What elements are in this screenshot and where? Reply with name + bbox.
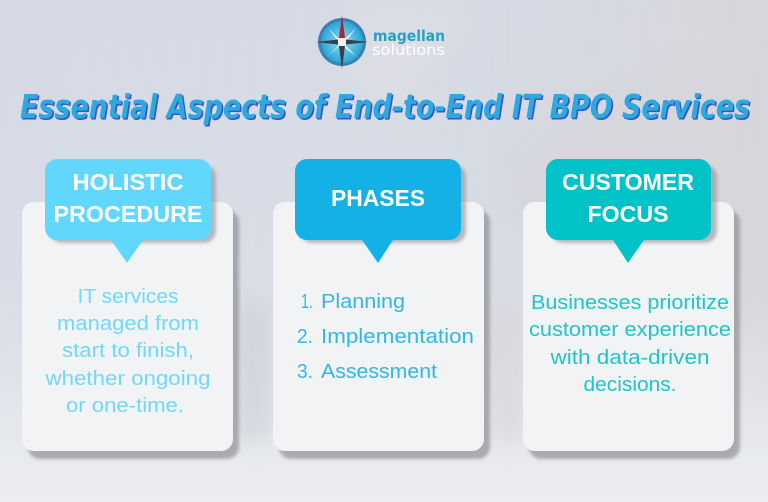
- logo wordmark: magellan: [373, 27, 445, 45]
- heading badge: [546, 159, 711, 263]
- logo: magellan solutions: [316, 15, 445, 69]
- icon: compass: [316, 15, 368, 69]
- heading badge: CUSTOMER: [562, 169, 694, 195]
- body text: [44, 285, 211, 417]
- heading badge: FOCUS: [588, 201, 668, 227]
- numbered list: Implementation: [321, 325, 474, 348]
- numbered list: Planning: [321, 290, 405, 313]
- body text: managed from: [57, 312, 199, 335]
- panel: holistic procedure: [22, 159, 239, 459]
- body text: with data-driven: [549, 346, 710, 369]
- body text: IT services: [78, 285, 178, 308]
- numbered list: 2.: [297, 325, 313, 348]
- numbered list: 3.: [297, 360, 313, 383]
- card body: [273, 202, 484, 451]
- body text: start to finish,: [62, 339, 194, 362]
- heading badge: [45, 159, 211, 263]
- numbered list: 1.: [301, 290, 313, 313]
- body text: [529, 291, 731, 396]
- logo wordmark: solutions: [372, 41, 445, 59]
- panel: phases: [273, 159, 490, 459]
- heading badge: PHASES: [331, 185, 425, 211]
- body text: customer experience: [529, 318, 731, 341]
- heading badge: PROCEDURE: [54, 201, 202, 227]
- body text: decisions.: [584, 373, 676, 396]
- numbered list: Assessment: [321, 360, 437, 383]
- body text: or one-time.: [66, 394, 184, 417]
- logo wordmark: [372, 27, 445, 59]
- numbered list: [297, 290, 474, 383]
- card body: [22, 202, 233, 451]
- panel: customer focus: [523, 159, 740, 459]
- heading badge: [295, 159, 461, 263]
- card body: [523, 202, 734, 451]
- heading badge: HOLISTIC: [72, 169, 184, 195]
- body text: Businesses prioritize: [531, 291, 729, 314]
- body text: whether ongoing: [44, 367, 211, 390]
